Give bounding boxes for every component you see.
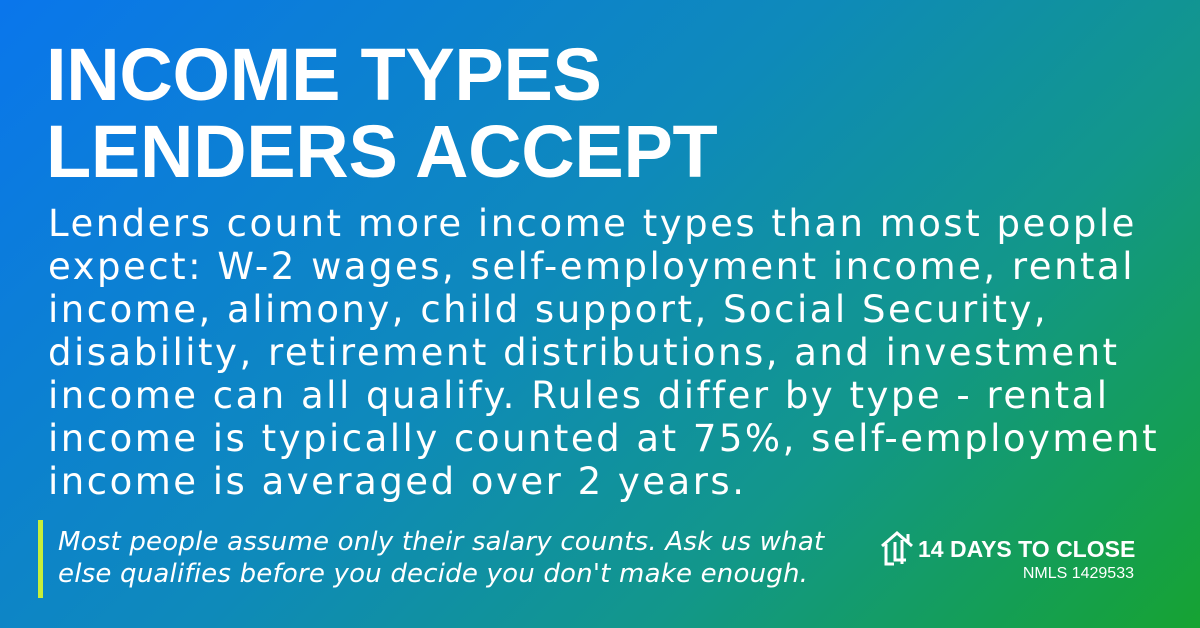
callout: quote (38, 520, 825, 598)
body text: expect: W-2 wages, self-employment income, rental (48, 245, 1135, 288)
quote text: else qualifies before you decide you don't make enough. (58, 559, 808, 589)
brand name: 14 DAYS TO CLOSE (918, 536, 1135, 562)
logo (881, 531, 1135, 582)
body text: income, alimony, child support, Social Security, (48, 288, 1048, 331)
title: INCOME TYPES (46, 33, 602, 116)
body text: Lenders count more income types than most people (48, 202, 1137, 245)
body text: income can all qualify. Rules differ by type - rental (48, 374, 1110, 417)
quote text: Most people assume only their salary counts. Ask us what (58, 527, 824, 557)
quote text (58, 527, 825, 589)
body text: disability, retirement distributions, and investment (48, 331, 1120, 374)
body text: income is typically counted at 75%, self-employment (48, 417, 1159, 460)
nmls: NMLS 1429533 (1023, 565, 1134, 582)
title: LENDERS ACCEPT (46, 110, 717, 193)
body text (48, 202, 1159, 503)
title (46, 33, 717, 193)
icon: house (881, 531, 913, 566)
body text: income is averaged over 2 years. (48, 460, 746, 503)
